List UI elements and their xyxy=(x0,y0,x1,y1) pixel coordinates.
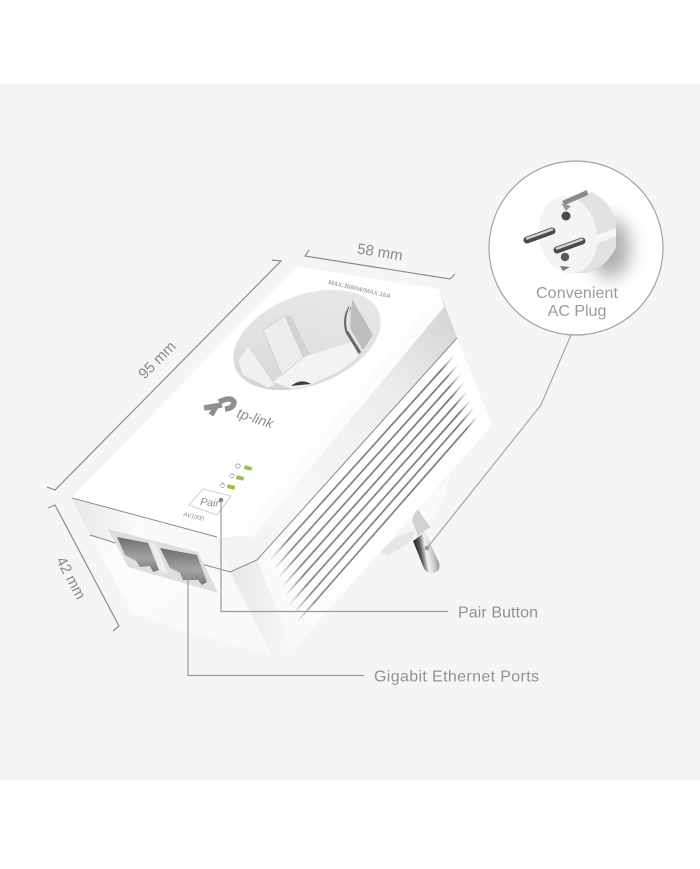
side housing xyxy=(257,300,492,657)
dimension: 42 mm xyxy=(48,505,119,631)
rear plug body xyxy=(400,475,450,530)
bevel highlight xyxy=(238,290,444,538)
label: Pair Button: Pair Button xyxy=(458,604,538,622)
plug label: Convenient xyxy=(536,285,619,302)
front face xyxy=(72,498,273,657)
AC plug circle callout xyxy=(489,161,663,335)
edge seam xyxy=(72,338,457,572)
socket recess xyxy=(219,270,395,410)
TP-Link logo xyxy=(204,399,276,432)
status LEDs xyxy=(220,464,252,490)
TP-Link logo: tp-link xyxy=(235,405,276,432)
Pair button: Pair xyxy=(200,496,220,510)
powerline adapter device xyxy=(72,267,492,657)
Pair button xyxy=(189,489,231,515)
dimension: 42 mm: 42 mm xyxy=(52,554,89,602)
plug shadow xyxy=(590,218,630,278)
dimension: 95 mm: 95 mm xyxy=(135,338,180,383)
AC plug circle callout: AC Plug xyxy=(548,303,606,320)
leader line: Gigabit Ethernet Ports xyxy=(186,564,364,676)
top face xyxy=(72,267,440,537)
leader line: Pair Button xyxy=(219,498,448,612)
ventilation fins xyxy=(270,357,477,622)
power rating label: MAX.3680W/MAX 16A xyxy=(328,279,392,300)
AV1000 label: AV1000 xyxy=(182,512,205,523)
dimension: 58 mm xyxy=(305,241,455,279)
leader line: AC plug xyxy=(425,335,571,550)
rounded front corner xyxy=(230,560,293,657)
chrome plug pin xyxy=(413,532,439,573)
dimension: 58 mm: 58 mm xyxy=(356,241,404,264)
front bevel xyxy=(72,498,230,572)
plug icon xyxy=(527,190,616,278)
bevel band xyxy=(216,290,457,572)
dimension: 95 mm xyxy=(47,260,281,490)
Ethernet ports xyxy=(108,529,218,593)
label: Gigabit Ethernet Ports: Gigabit Ethernet Ports xyxy=(374,668,539,686)
